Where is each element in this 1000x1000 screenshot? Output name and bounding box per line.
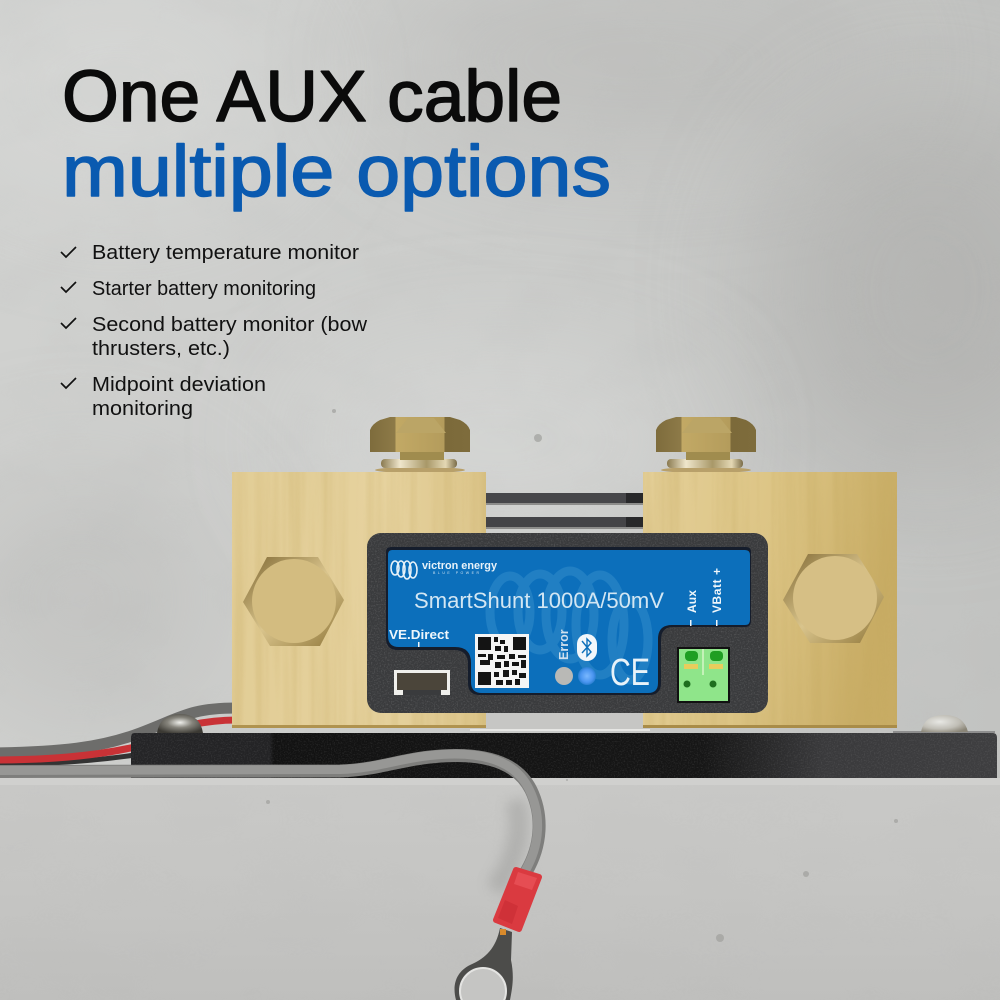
terminal label: Aux: Aux: [685, 590, 699, 613]
cable shadow on ledge: [495, 800, 519, 890]
title: multiple options: [62, 132, 611, 212]
item: battery temperature monitor: Battery temperature monitor: [92, 242, 359, 264]
item: second battery monitor: Second battery monitor (bow: [92, 314, 368, 336]
feature checklist: [61, 242, 368, 420]
logo: victron energy: victron energy: [422, 560, 498, 572]
blue label panel: [386, 547, 751, 695]
error LED: [555, 667, 573, 685]
ledge: concrete shelf: [0, 778, 1000, 1000]
watermark swirl: [490, 571, 648, 680]
item: starter battery monitoring: Starter battery monitoring: [92, 278, 316, 300]
background: concrete wall: [0, 0, 1000, 780]
bluetooth LED: [578, 667, 596, 685]
item: midpoint deviation monitoring: Midpoint deviation: [92, 374, 266, 396]
VE.Direct port: [394, 670, 450, 695]
terminal bolt left: [370, 417, 470, 473]
gray AUX cable: [0, 754, 539, 872]
side bolt right: [783, 554, 884, 643]
port label: VE.Direct: VE.Direct: [389, 627, 450, 642]
terminal bolt right: [656, 417, 756, 473]
title: [62, 57, 611, 212]
wall and ledge pits: [266, 409, 898, 942]
product name: SmartShunt 1000A/50mV: [414, 588, 664, 613]
SmartShunt module housing: [367, 533, 768, 713]
base plate: [131, 731, 997, 778]
item: midpoint deviation monitoring: monitoring: [92, 398, 193, 420]
logo: victron energy: [391, 560, 498, 579]
item: second battery monitor: [61, 314, 368, 360]
logo: victron energy: BLUE POWER: [433, 571, 479, 575]
side bolt left: [243, 557, 344, 646]
item: second battery monitor: thrusters, etc.): [92, 338, 230, 360]
plate screw right: [921, 715, 968, 732]
red crimp terminal: [496, 870, 539, 929]
terminal label: Aux: [685, 590, 699, 626]
QR code: [475, 634, 529, 688]
plate screw left: [157, 714, 203, 733]
Error label: Error: [557, 629, 571, 660]
green terminal connector: [677, 647, 730, 703]
ring terminal: [455, 928, 513, 1000]
shunt resistor bars: [470, 493, 650, 731]
terminal label: VBatt +: VBatt +: [710, 568, 724, 613]
item: midpoint deviation monitoring: [61, 374, 266, 420]
Bluetooth badge: [577, 634, 597, 661]
rear wires: [0, 708, 236, 764]
title: One AUX cable: [62, 57, 562, 137]
brass block right: [643, 472, 897, 728]
brass block left: [232, 472, 486, 728]
CE mark: CE: [610, 652, 650, 694]
